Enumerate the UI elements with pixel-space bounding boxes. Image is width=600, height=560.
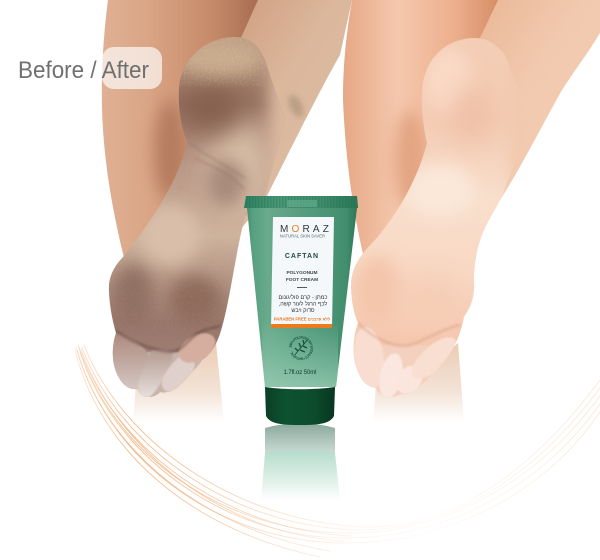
tube body — [247, 208, 357, 387]
before / after label pill — [102, 47, 162, 89]
paraben free line: PARABEN FREE ללא פרבנים — [274, 316, 331, 322]
before: toes — [112, 332, 216, 397]
decorative orange arc swoosh — [75, 345, 600, 557]
dash — [297, 286, 307, 289]
after leg and foot — [340, 0, 600, 422]
after: smooth sole — [351, 38, 511, 398]
before / after label: Before / After — [18, 57, 149, 84]
after: faded lower leg — [373, 343, 464, 422]
product name: CAFTAN — [285, 253, 319, 260]
tube crimp — [244, 196, 358, 208]
after: standing calf — [343, 0, 500, 258]
product type: FOOT CREAM — [286, 277, 318, 283]
before: standing calf — [102, 0, 260, 258]
tube cap — [265, 387, 335, 425]
tube reflection — [261, 424, 340, 500]
reflection: cap — [265, 424, 335, 453]
before: cracked sole — [108, 37, 285, 397]
after: calf shadow beside heel — [394, 110, 426, 210]
hebrew description: לכף הרגל לעור קשה, — [279, 300, 327, 308]
hebrew description — [279, 294, 328, 314]
reflection: body — [261, 451, 340, 500]
before: faded lower leg — [133, 343, 224, 422]
hebrew description: סדוק ויבש — [291, 308, 315, 314]
before: raised ankle — [200, 0, 352, 230]
label panel — [271, 217, 334, 328]
before: calf shadow beside heel — [154, 100, 186, 200]
after: raised ankle — [440, 0, 600, 230]
product tube — [244, 196, 358, 425]
brand name: MORAZ — [280, 224, 332, 235]
before leg and foot — [100, 0, 352, 422]
tube label — [271, 217, 334, 328]
hebrew description: כמתן - קרם פוליגונום — [279, 294, 328, 301]
orange strip — [271, 324, 332, 328]
tagline: NATURAL SKIN SAVER — [280, 234, 325, 238]
product type — [286, 270, 318, 283]
product type: POLYGONUM — [286, 270, 318, 276]
polygonum seal: 100% POLYGONUM * EXTRACT * NATURAL — [289, 336, 314, 360]
after: toes — [354, 327, 456, 397]
volume text: 1.7fl.oz 50ml — [284, 370, 316, 376]
before: bruise on ankle — [285, 93, 307, 119]
